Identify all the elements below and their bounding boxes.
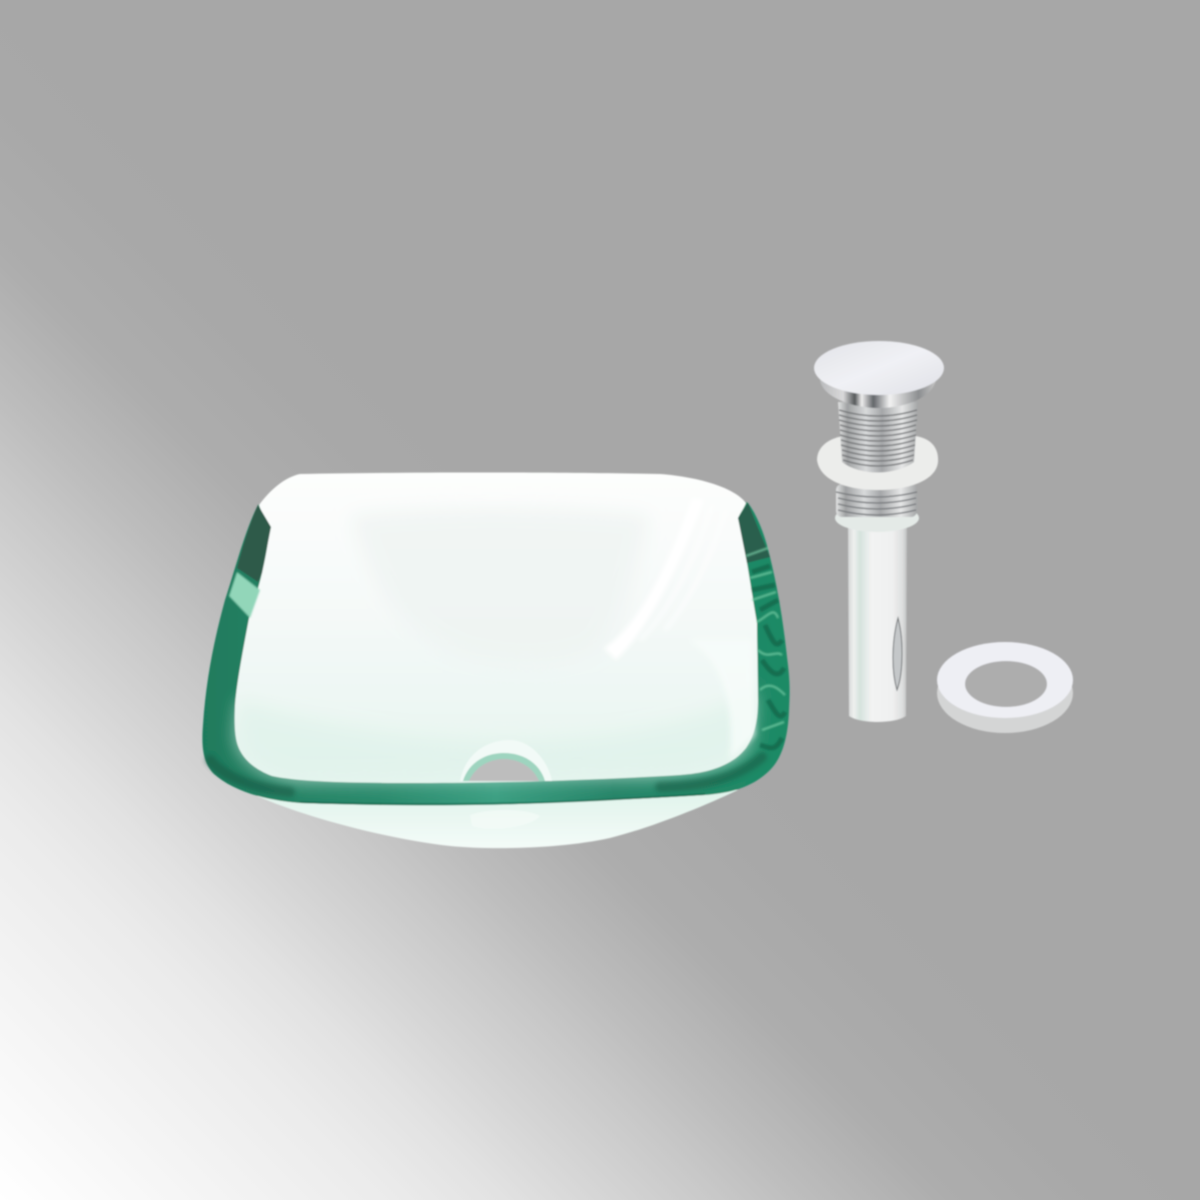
right corner shading — [660, 757, 762, 787]
right wall dark ripples — [752, 566, 785, 748]
right wall bright ripples — [746, 548, 785, 730]
left corner shading — [210, 760, 290, 792]
bottom rim shadow band — [300, 794, 705, 804]
drain tube — [848, 525, 907, 722]
upper thread lines — [839, 410, 917, 466]
sink underside drain reflection — [470, 810, 540, 829]
green tint near bottom of the bowl — [236, 690, 755, 781]
right wall dark top — [738, 503, 770, 563]
bowl interior — [235, 472, 758, 783]
sink underside — [257, 780, 738, 848]
upper threaded section — [838, 402, 918, 472]
bright highlight streak — [604, 498, 704, 660]
green glass rim — [202, 480, 790, 805]
left wall dark top — [237, 505, 271, 582]
ring opening — [965, 661, 1047, 707]
drain hole opening — [469, 759, 539, 781]
drain overflow slot — [893, 618, 902, 690]
ring thickness — [937, 653, 1073, 733]
lower threaded section — [836, 484, 917, 517]
drain hole green ring — [463, 753, 545, 781]
glass vessel sink — [202, 472, 790, 848]
white flange — [817, 436, 938, 490]
chrome cap skirt — [820, 376, 936, 408]
chrome cap top — [814, 341, 944, 395]
basin floor shading — [350, 508, 650, 664]
ring flange — [937, 642, 1073, 733]
rim shading details — [210, 503, 785, 804]
drain hole glass edge — [460, 740, 552, 781]
ring top face — [937, 642, 1073, 718]
lower thread lines — [836, 492, 917, 515]
lower white washer — [835, 504, 919, 532]
right wall highlight — [690, 640, 755, 760]
secondary highlight streaks — [640, 505, 726, 640]
pop-up drain assembly — [814, 341, 944, 722]
drain hole — [460, 740, 552, 781]
lower thread body — [836, 484, 917, 517]
left wall light patch — [229, 572, 260, 618]
upper thread body — [838, 402, 918, 472]
